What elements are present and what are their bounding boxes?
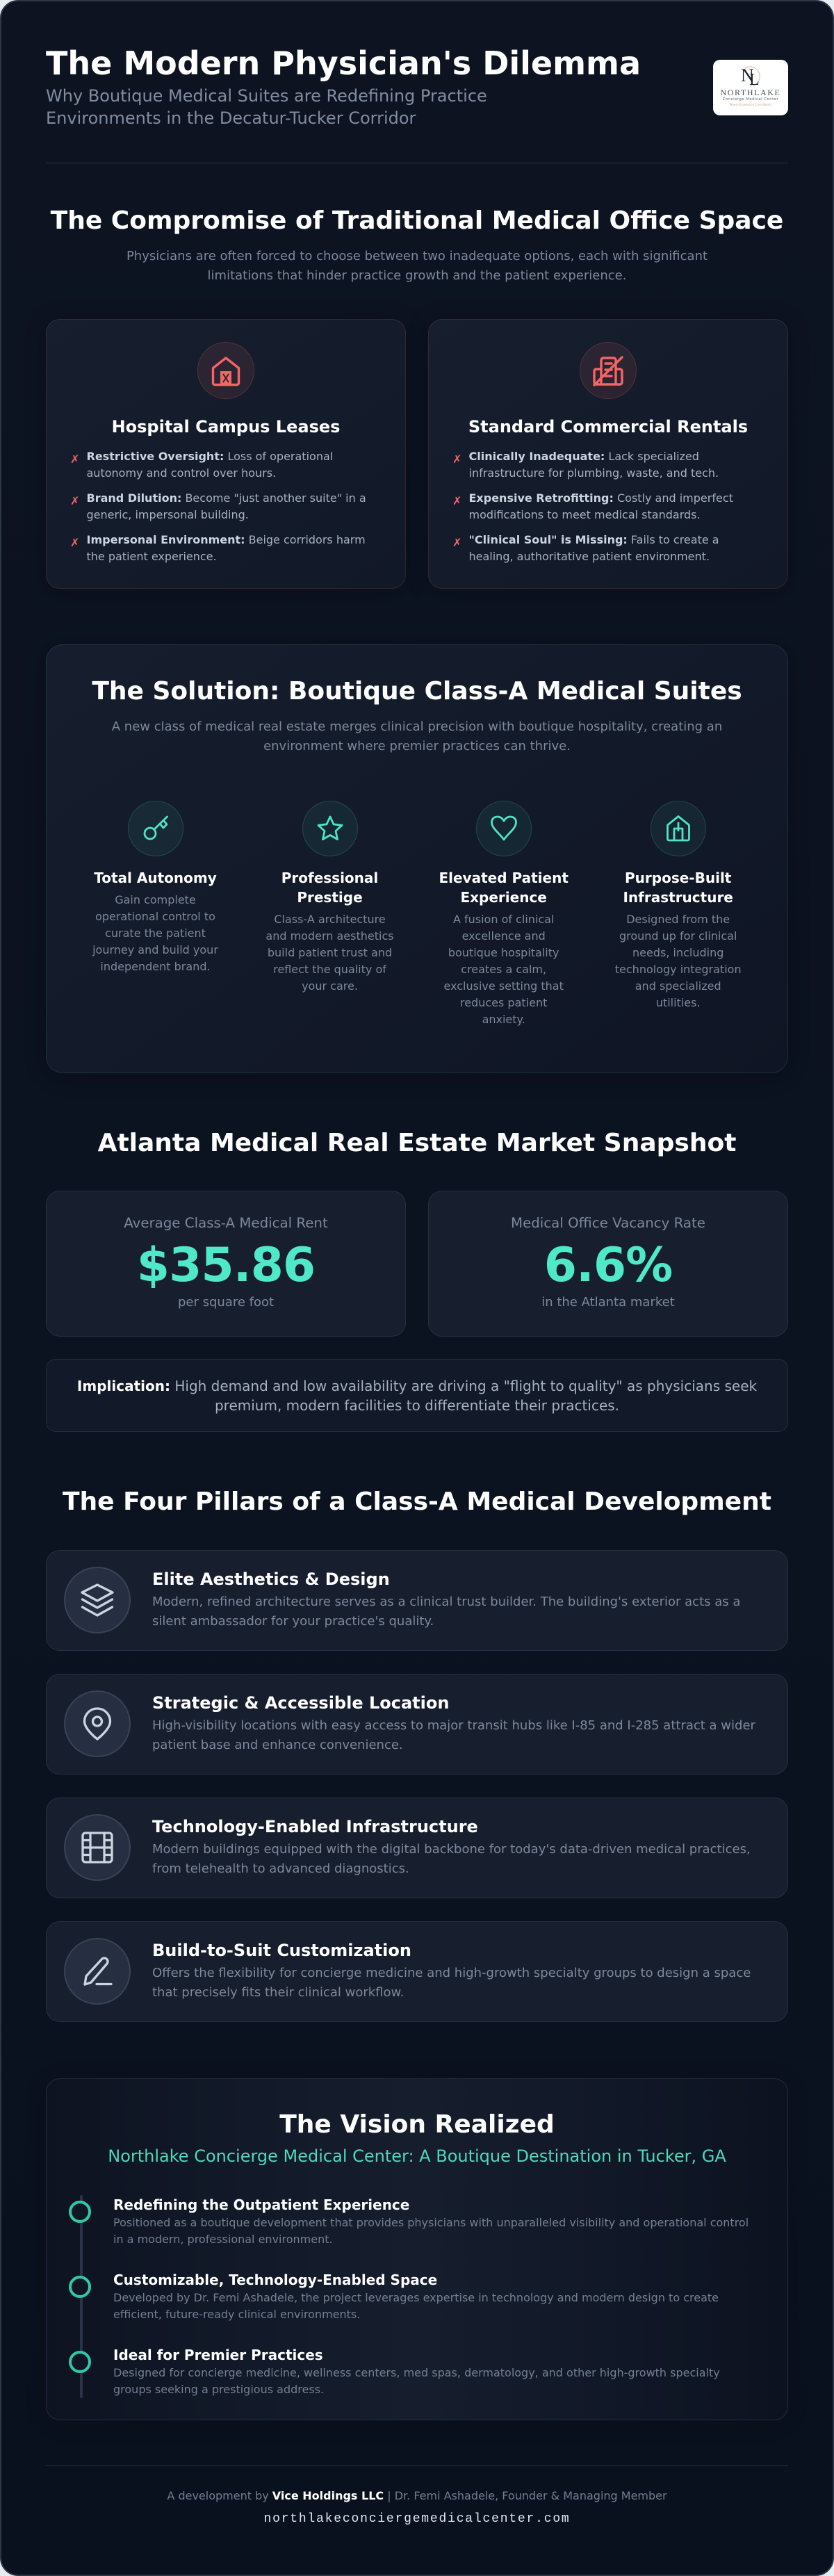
pillar title: Build-to-Suit Customization: [152, 1941, 411, 1960]
logo: Northlake: [713, 60, 788, 115]
icon: heart: [476, 801, 532, 856]
list text 2: Brand Dilution: Become "just another suite" in a: [86, 491, 366, 505]
benefit text: journey and build your: [92, 943, 218, 956]
header title: The Modern Physician's Dilemma: [46, 44, 641, 82]
timeline text 2: [113, 2291, 719, 2321]
panel: the vision realized: [46, 2078, 788, 2420]
footer credit: A development by Vice Holdings LLC | Dr. Femi Ashadele, Founder & Managing Member: [167, 2489, 667, 2502]
benefit text: [92, 893, 218, 973]
benefit text: [443, 912, 564, 1026]
stat value: $35.86: [137, 1238, 315, 1293]
benefit text: excellence and: [462, 929, 546, 943]
footer url: northlakeconciergemedicalcenter.com: [263, 2512, 571, 2526]
pillar text: [152, 1966, 751, 2000]
list text 2: [86, 491, 366, 521]
benefit title: [439, 870, 569, 906]
timeline title 1: Redefining the Outpatient Experience: [113, 2196, 409, 2213]
list text 3: [468, 533, 719, 563]
list text 3: Impersonal Environment: Beige corridors harm: [86, 533, 366, 546]
timeline line: [80, 2195, 83, 2398]
logo: Northlake: NORTHLAKE: [720, 88, 781, 97]
card title: Standard Commercial Rentals: [468, 417, 748, 437]
list text 2: generic, impersonal building.: [86, 508, 249, 521]
benefit text: operational control to: [95, 910, 215, 923]
list text 1: autonomy and control over hours.: [86, 466, 276, 480]
benefit text: Gain complete: [115, 893, 196, 906]
timeline text 1: Positioned as a boutique development that provides physicians with unparalleled visibility and operational control: [113, 2216, 749, 2229]
heading: solution: The Solution: Boutique Class-A Medical Suites: [92, 677, 742, 706]
benefit: purpose-built infrastructure: [615, 801, 742, 1009]
header subtitle: [46, 86, 487, 128]
benefit text: reduces patient: [460, 995, 547, 1009]
header subtitle: Why Boutique Medical Suites are Redefining Practice: [46, 86, 487, 106]
logo: Northlake: N: [741, 65, 754, 85]
pillar text: from telehealth to advanced diagnostics.: [152, 1861, 409, 1876]
stat label: Average Class-A Medical Rent: [124, 1215, 328, 1231]
timeline marker 1: [69, 2201, 91, 2223]
callout text: premium, modern facilities to differentiate their practices.: [215, 1397, 619, 1414]
timeline text 1: in a modern, professional environment.: [113, 2233, 333, 2246]
footer divider: [46, 2465, 788, 2466]
compromise intro text: Physicians are often forced to choose between two inadequate options, each with significant: [126, 249, 708, 263]
list item 3: ✗: [70, 535, 79, 549]
pillar text: [152, 1595, 740, 1629]
benefit text: and specialized: [635, 979, 721, 993]
benefit: elevated patient experience: [439, 801, 569, 1026]
timeline text 3: [113, 2366, 720, 2396]
benefit text: exclusive setting that: [443, 979, 564, 993]
list text 1: [468, 450, 719, 480]
icon: hospital house: [197, 342, 254, 399]
timeline text 3: Designed for concierge medicine, wellness centers, med spas, dermatology, and other high-growth specialty: [113, 2366, 720, 2379]
list text 1: Clinically Inadequate: Lack specialized: [468, 450, 699, 463]
icon: star: [302, 801, 357, 856]
benefit text: your care.: [302, 979, 358, 993]
benefit text: A fusion of clinical: [453, 912, 554, 926]
list text 1: Restrictive Oversight: Loss of operational: [86, 450, 333, 463]
pillar text: Modern, refined architecture serves as a clinical trust builder. The building's exterior acts as a: [152, 1595, 740, 1609]
pillar text: patient base and enhance convenience.: [152, 1738, 403, 1752]
compromise intro text: [126, 249, 708, 282]
timeline text 3: groups seeking a prestigious address.: [113, 2383, 324, 2396]
heading: market snapshot: Atlanta Medical Real Estate Market Snapshot: [98, 1129, 736, 1157]
benefit text: ground up for clinical: [619, 929, 737, 943]
pillar: technology: [46, 1798, 788, 1898]
pillar text: that precisely fits their clinical workflow.: [152, 1985, 404, 2000]
icon: map pin: [64, 1690, 131, 1757]
benefit: professional prestige: [265, 801, 394, 993]
benefit text: [265, 912, 394, 993]
header subtitle: Environments in the Decatur-Tucker Corridor: [46, 108, 416, 128]
benefit text: reflect the quality of: [273, 962, 386, 976]
benefit title: Prestige: [297, 889, 363, 906]
callout text: [77, 1378, 757, 1414]
callout: implication: [46, 1359, 788, 1432]
timeline title 2: Customizable, Technology-Enabled Space: [113, 2272, 437, 2288]
benefit text: utilities.: [656, 995, 701, 1009]
benefit text: Designed from the: [626, 912, 730, 926]
vision subtitle: Northlake Concierge Medical Center: A Boutique Destination in Tucker, GA: [108, 2146, 726, 2166]
heading: vision: The Vision Realized: [279, 2110, 555, 2138]
list item 3: ✗: [452, 535, 461, 549]
list text 2: modifications to meet medical standards.: [468, 508, 701, 521]
icon: film frame: [64, 1814, 131, 1881]
benefit text: technology integration: [615, 962, 742, 976]
pillar text: High-visibility locations with easy access to major transit hubs like I-85 and I-285 attract a wider: [152, 1718, 755, 1733]
pillar: location: [46, 1674, 788, 1775]
callout text: Implication: High demand and low availability are driving a "flight to quality" as physicians seek: [77, 1378, 757, 1394]
logo: Northlake: Where Excellence Care Begins: [730, 103, 771, 106]
benefit: total autonomy: [92, 801, 218, 973]
list item 2: ✗: [70, 494, 79, 507]
benefit title: Professional: [281, 870, 378, 886]
panel: hospital campus leases: [46, 319, 406, 589]
pillar title: Technology-Enabled Infrastructure: [152, 1817, 478, 1836]
timeline title 3: Ideal for Premier Practices: [113, 2347, 323, 2363]
panel: the solution: [46, 644, 788, 1073]
benefit title: [623, 870, 733, 906]
timeline marker 2: [69, 2276, 91, 2298]
stat value: 6.6%: [544, 1238, 672, 1293]
timeline text 1: [113, 2216, 749, 2246]
benefit text: build patient trust and: [268, 945, 392, 959]
list text 2: Expensive Retrofitting: Costly and imperfect: [468, 491, 733, 505]
heading: four pillars: The Four Pillars of a Class-A Medical Development: [63, 1487, 771, 1515]
benefit text: Class-A architecture: [274, 912, 386, 926]
pillar text: Offers the flexibility for concierge medicine and high-growth specialty groups to design a space: [152, 1966, 751, 1980]
pillar text: Modern buildings equipped with the digital backbone for today's data-driven medical practices,: [152, 1842, 751, 1857]
benefit text: creates a calm,: [461, 962, 546, 976]
icon: crossed-out building: [580, 342, 637, 399]
solution intro text: environment where premier practices can thrive.: [263, 738, 571, 753]
icon: pen: [64, 1938, 131, 2005]
stat card: vacancy: [428, 1191, 788, 1337]
benefit text: boutique hospitality: [448, 945, 559, 959]
timeline text 2: Developed by Dr. Femi Ashadele, the project leverages expertise in technology and modern design to create: [113, 2291, 719, 2304]
list text 3: "Clinical Soul" is Missing: Fails to create a: [468, 533, 719, 546]
list text 2: [468, 491, 733, 521]
icon: purpose-built house: [651, 801, 706, 856]
pillar title: Elite Aesthetics & Design: [152, 1570, 390, 1589]
list item 1: ✗: [452, 452, 461, 466]
benefit title: Infrastructure: [623, 889, 733, 906]
list text 3: [86, 533, 366, 563]
heading: compromise: The Compromise of Traditional Medical Office Space: [51, 206, 783, 235]
panel: standard commercial rentals: [428, 319, 788, 589]
stat label: Medical Office Vacancy Rate: [511, 1215, 705, 1231]
list text 3: the patient experience.: [86, 550, 217, 563]
icon: layers: [64, 1567, 131, 1633]
benefit title: Elevated Patient: [439, 870, 569, 886]
benefit title: Experience: [460, 889, 547, 906]
pillar text: [152, 1718, 755, 1752]
stat card: rent: [46, 1191, 406, 1337]
pillar: aesthetics: [46, 1550, 788, 1651]
benefit text: and modern aesthetics: [265, 929, 394, 943]
stat note: per square foot: [178, 1295, 274, 1310]
pillar: customization: [46, 1921, 788, 2022]
pillar title: Strategic & Accessible Location: [152, 1693, 449, 1713]
benefit text: [615, 912, 742, 1009]
benefit text: needs, including: [632, 945, 723, 959]
benefit text: anxiety.: [482, 1012, 525, 1026]
pillar text: [152, 1842, 751, 1876]
list item 2: ✗: [452, 494, 461, 507]
icon: key: [128, 801, 183, 856]
list text 1: [86, 450, 333, 480]
logo: Northlake: L: [749, 71, 760, 89]
list text 3: healing, authoritative patient environment.: [468, 550, 710, 563]
benefit title: Total Autonomy: [94, 870, 217, 886]
stat note: in the Atlanta market: [541, 1295, 675, 1310]
pillar text: silent ambassador for your practice's quality.: [152, 1614, 434, 1629]
logo: Northlake: Concierge Medical Center: [723, 97, 778, 101]
solution intro text: [112, 719, 722, 753]
list text 1: infrastructure for plumbing, waste, and tech.: [468, 466, 719, 480]
benefit text: curate the patient: [105, 927, 206, 940]
timeline marker 3: [69, 2351, 91, 2373]
card title: Hospital Campus Leases: [112, 417, 340, 437]
solution intro text: A new class of medical real estate merges clinical precision with boutique hospitality, creating an: [112, 719, 722, 734]
list item 1: ✗: [70, 452, 79, 466]
benefit text: independent brand.: [100, 960, 211, 973]
benefit title: [281, 870, 378, 906]
timeline text 2: efficient, future-ready clinical environments.: [113, 2308, 360, 2321]
benefit title: Purpose-Built: [625, 870, 731, 886]
compromise intro text: limitations that hinder practice growth and the patient experience.: [208, 268, 626, 282]
